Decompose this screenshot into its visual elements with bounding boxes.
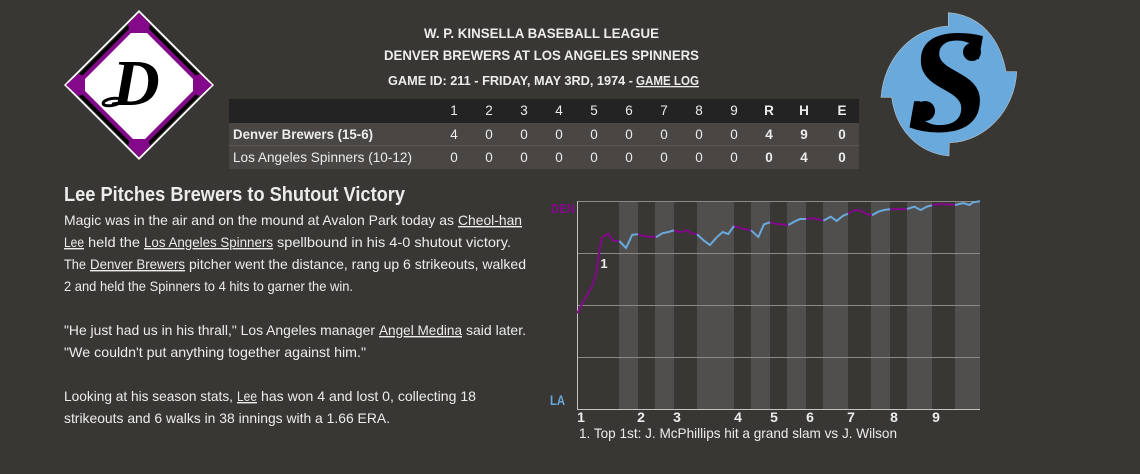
- row: Denver Brewers: 0: [485, 127, 493, 142]
- row: Denver Brewers: 0: [730, 127, 738, 142]
- inning labels: 1: [577, 409, 585, 425]
- line score table: H: [799, 103, 809, 118]
- text block: article body: has won 4 and lost 0, collecting 18: [261, 388, 476, 404]
- text block: article body: Cheol-han: [458, 212, 522, 228]
- line score table: 2: [485, 103, 493, 118]
- heading: article headline: Lee Pitches Brewers to Shutout Victory: [64, 184, 406, 206]
- row: Los Angeles Spinners: 0: [838, 150, 846, 165]
- row: Denver Brewers: 0: [590, 127, 598, 142]
- inning labels: 6: [806, 409, 814, 425]
- row: Denver Brewers: 0: [555, 127, 563, 142]
- row: Denver Brewers: 4: [765, 127, 773, 142]
- text block: article body: 2 and held the Spinners to 4 hits to garner the win.: [64, 278, 353, 294]
- line score table: R: [764, 103, 774, 118]
- row: Denver Brewers: 0: [520, 127, 528, 142]
- row: Denver Brewers: 4: [450, 127, 458, 142]
- line score table: E: [837, 103, 847, 118]
- text block: article body: Magic was in the air and on the mound at Avalon Park today as: [64, 212, 454, 228]
- row: Denver Brewers: 9: [800, 127, 808, 142]
- line score table: 3: [520, 103, 528, 118]
- title: league and matchup: GAME LOG: [636, 73, 699, 88]
- line score table: 9: [730, 103, 738, 118]
- label: Denver axis: DEN: [551, 201, 575, 216]
- row: Denver Brewers: Denver Brewers (15-6): [233, 126, 373, 142]
- text block: article body: said later.: [466, 322, 526, 338]
- row: Los Angeles Spinners: 0: [590, 150, 598, 165]
- text block: article body: Denver Brewers: [90, 256, 185, 272]
- text block: article body: Los Angeles Spinners: [144, 234, 273, 250]
- text block: article body: pitcher went the distance, rang up 6 strikeouts, walked: [189, 256, 526, 272]
- text block: article body: Angel Medina: [379, 322, 462, 338]
- row: Los Angeles Spinners: 0: [695, 150, 703, 165]
- inning labels: [577, 409, 940, 425]
- row: Los Angeles Spinners: 4: [800, 150, 808, 165]
- line score table: 8: [695, 103, 703, 118]
- row: Los Angeles Spinners: 0: [520, 150, 528, 165]
- text block: article body: Lee: [64, 234, 84, 250]
- inning labels: 7: [847, 409, 855, 425]
- line score table: 4: [555, 103, 563, 118]
- text block: article body: held the: [88, 234, 140, 250]
- annotation: event 1: 1: [600, 256, 608, 271]
- row: Los Angeles Spinners: 0: [625, 150, 633, 165]
- text block: article body: Looking at his season stats,: [64, 388, 233, 404]
- row: Los Angeles Spinners: 0: [660, 150, 668, 165]
- line score table: 6: [625, 103, 633, 118]
- inning labels: 4: [734, 409, 742, 425]
- inning labels: 5: [770, 409, 778, 425]
- title: league and matchup: GAME ID: 211 - FRIDAY, MAY 3RD, 1974 -: [388, 73, 633, 88]
- icon: Denver Brewers logo: D: [111, 47, 160, 120]
- row: Los Angeles Spinners: [233, 149, 846, 165]
- icon: Denver Brewers logo: [64, 10, 214, 160]
- inning labels: 2: [637, 409, 645, 425]
- line score table: [229, 99, 859, 169]
- row: Denver Brewers: 0: [695, 127, 703, 142]
- text block: article body: [64, 212, 526, 426]
- title: league and matchup: [384, 25, 699, 88]
- text block: article body: "He just had us in his thrall," Los Angeles manager: [64, 322, 375, 338]
- row: Denver Brewers: 0: [838, 127, 846, 142]
- row: Los Angeles Spinners: 0: [765, 150, 773, 165]
- row: Los Angeles Spinners: 0: [730, 150, 738, 165]
- title: league and matchup: W. P. KINSELLA BASEBALL LEAGUE: [424, 25, 659, 41]
- text block: article body: Lee: [237, 388, 257, 404]
- line: Denver lead segments: [577, 204, 955, 313]
- row: Los Angeles Spinners: 0: [485, 150, 493, 165]
- text block: article body: "We couldn't put anything together against him.": [64, 344, 366, 360]
- icon: Los Angeles Spinners logo: [881, 0, 1017, 164]
- line score table: 7: [660, 103, 668, 118]
- label: Los Angeles axis: LA: [550, 392, 565, 408]
- text block: article body: spellbound in his 4-0 shutout victory.: [277, 234, 511, 250]
- inning labels: 9: [932, 409, 940, 425]
- chart: win probability: [550, 201, 980, 441]
- row: Denver Brewers: [233, 126, 846, 142]
- row: Los Angeles Spinners: 0: [450, 150, 458, 165]
- text block: article body: The: [64, 256, 86, 272]
- row: Denver Brewers: 0: [660, 127, 668, 142]
- row: Denver Brewers: 0: [625, 127, 633, 142]
- row: Los Angeles Spinners: 0: [555, 150, 563, 165]
- text block: article body: strikeouts and 6 walks in 38 innings with a 1.66 ERA.: [64, 410, 390, 426]
- inning labels: 3: [673, 409, 681, 425]
- line score table: 5: [590, 103, 598, 118]
- chart footnote: 1. Top 1st: J. McPhillips hit a grand slam vs J. Wilson: [579, 425, 897, 441]
- line: Los Angeles batting segments: [619, 201, 980, 248]
- inning labels: 8: [890, 409, 898, 425]
- line score table: 1: [450, 103, 458, 118]
- title: league and matchup: DENVER BREWERS AT LOS ANGELES SPINNERS: [384, 47, 699, 63]
- icon: Los Angeles Spinners logo: S: [907, 0, 989, 164]
- row: Los Angeles Spinners: Los Angeles Spinners (10-12): [233, 149, 412, 165]
